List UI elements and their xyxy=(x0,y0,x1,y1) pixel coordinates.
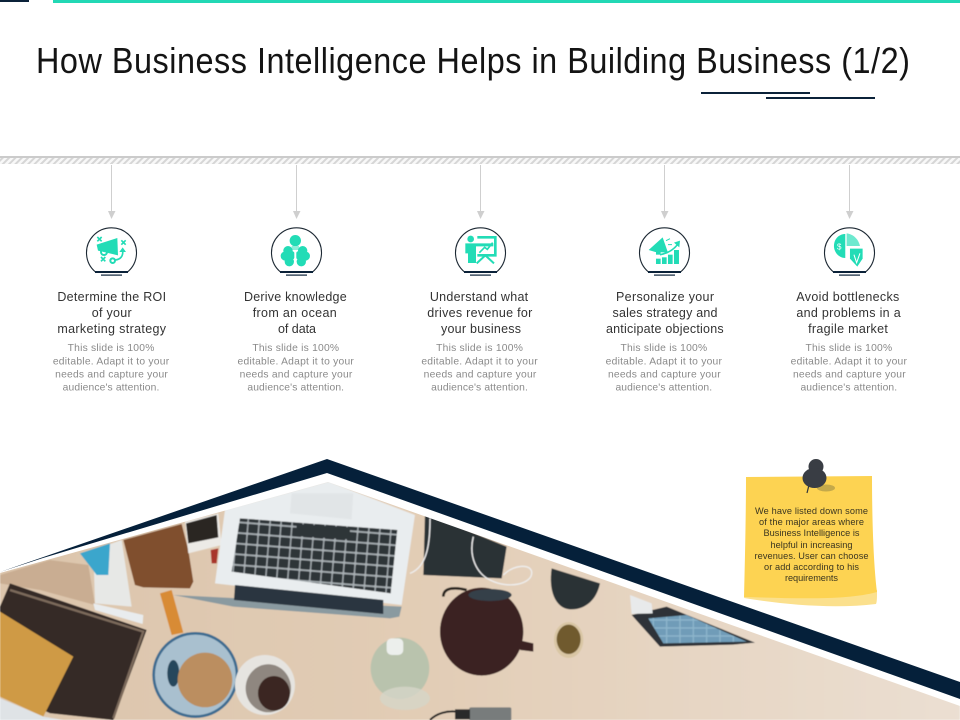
heading 5: fragile market xyxy=(808,322,888,336)
arrow 3 xyxy=(477,165,484,219)
body text 2: This slide is 100% xyxy=(252,343,339,354)
note text: or add according to his xyxy=(764,562,859,572)
body text 3: This slide is 100% xyxy=(436,343,523,354)
note text: of the major areas where xyxy=(759,517,864,527)
body text 5 xyxy=(791,343,908,394)
title underline accents xyxy=(701,92,875,99)
navy roof frame xyxy=(0,459,960,699)
body text 4: This slide is 100% xyxy=(620,343,707,354)
heading 1 xyxy=(57,290,167,336)
body text 2: needs and capture your xyxy=(240,370,353,381)
note text: We have listed down some xyxy=(755,506,868,516)
heading 2: Derive knowledge xyxy=(244,290,347,304)
arrow 1 xyxy=(108,165,116,219)
icon: megaphone and rising bars xyxy=(640,228,689,276)
heading 1: Determine the ROI xyxy=(57,290,166,304)
heading 2: from an ocean xyxy=(253,306,337,320)
body text 5: editable. Adapt it to your xyxy=(791,356,908,367)
body text 2: audience's attention. xyxy=(247,382,344,394)
hatched divider band xyxy=(0,156,960,164)
body text 3: editable. Adapt it to your xyxy=(421,356,538,367)
note text: requirements xyxy=(785,573,838,583)
note text: helpful in increasing xyxy=(770,540,852,550)
heading 4 xyxy=(606,290,724,336)
body text 3: needs and capture your xyxy=(424,370,537,381)
body text 4: needs and capture your xyxy=(608,370,721,381)
heading 3: Understand what xyxy=(430,290,529,304)
arrow 4 xyxy=(661,165,668,219)
body text 1 xyxy=(53,343,170,394)
heading 4: sales strategy and xyxy=(612,306,718,320)
note text xyxy=(754,506,868,583)
body text 1: audience's attention. xyxy=(63,382,159,394)
body text 1: editable. Adapt it to your xyxy=(53,356,170,367)
body text 5: audience's attention. xyxy=(800,382,897,394)
heading 3 xyxy=(427,290,532,336)
heading 4: Personalize your xyxy=(616,290,714,304)
sticky note xyxy=(744,459,877,606)
body text 4: editable. Adapt it to your xyxy=(606,356,723,367)
laptop xyxy=(173,482,415,618)
heading 5: and problems in a xyxy=(796,306,901,320)
note paper xyxy=(744,476,877,606)
heading 1: marketing strategy xyxy=(57,322,167,336)
body text 3 xyxy=(421,343,538,394)
wood desk surface xyxy=(0,470,960,720)
note text: Business Intelligence is xyxy=(764,528,860,538)
body text 5: This slide is 100% xyxy=(805,343,892,354)
icon: push pin xyxy=(802,459,835,493)
heading 5 xyxy=(796,290,901,336)
arrow 5 xyxy=(846,165,854,219)
heading 1: of your xyxy=(92,306,132,320)
heading 3: drives revenue for xyxy=(427,306,532,320)
body text 4 xyxy=(606,343,723,394)
title: How Business Intelligence Helps in Building Business (1/2) xyxy=(36,41,910,81)
body text 2: editable. Adapt it to your xyxy=(238,356,354,367)
body text 3: audience's attention. xyxy=(431,382,528,394)
note text: revenues. User can choose xyxy=(754,551,868,561)
column 2: knowledge xyxy=(238,165,354,394)
icon: pie chart with shield: $ xyxy=(837,242,842,251)
top accent bar xyxy=(0,0,960,3)
body text 2 xyxy=(238,343,354,394)
heading 2 xyxy=(244,290,347,336)
column 1: marketing ROI xyxy=(53,165,170,394)
heading 2: of data xyxy=(278,322,316,336)
heading 3: your business xyxy=(441,322,521,336)
right side objects xyxy=(410,513,755,720)
icon: presenter at chart board xyxy=(455,228,506,276)
icon: megaphone and strategy xyxy=(86,228,136,276)
column 3: revenue xyxy=(421,165,538,394)
heading 5: Avoid bottlenecks xyxy=(796,290,899,304)
photo: desk from above xyxy=(0,470,960,720)
body text 5: needs and capture your xyxy=(793,370,906,381)
body text 4: audience's attention. xyxy=(615,382,712,394)
body text 1: needs and capture your xyxy=(55,370,168,381)
desk objects on left xyxy=(0,513,430,720)
icon: pie chart with shield xyxy=(825,228,874,276)
heading 4: anticipate objections xyxy=(606,322,724,336)
column 5: bottlenecks xyxy=(791,165,908,394)
body text 1: This slide is 100% xyxy=(68,343,154,354)
column 4: sales strategy xyxy=(606,165,724,394)
arrow 2 xyxy=(293,165,300,219)
icon: brain with light bulb xyxy=(272,228,322,276)
